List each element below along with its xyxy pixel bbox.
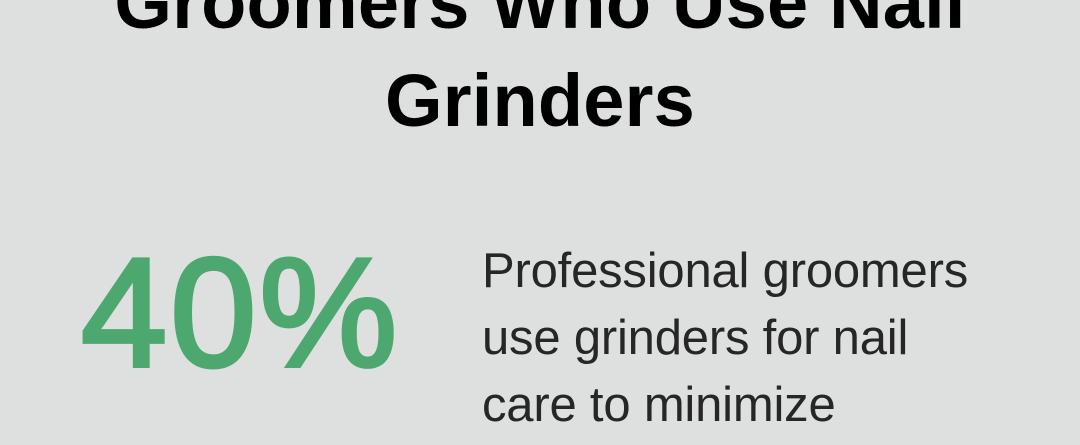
big statistic: 40%: 40% <box>81 226 400 399</box>
statistic description: Professional groomers <box>482 244 968 298</box>
heading: Grinders <box>385 59 695 142</box>
statistic description: use grinders for nail <box>482 311 908 365</box>
statistic description <box>482 244 968 432</box>
heading <box>114 0 966 142</box>
statistic description: care to minimize <box>482 378 836 432</box>
